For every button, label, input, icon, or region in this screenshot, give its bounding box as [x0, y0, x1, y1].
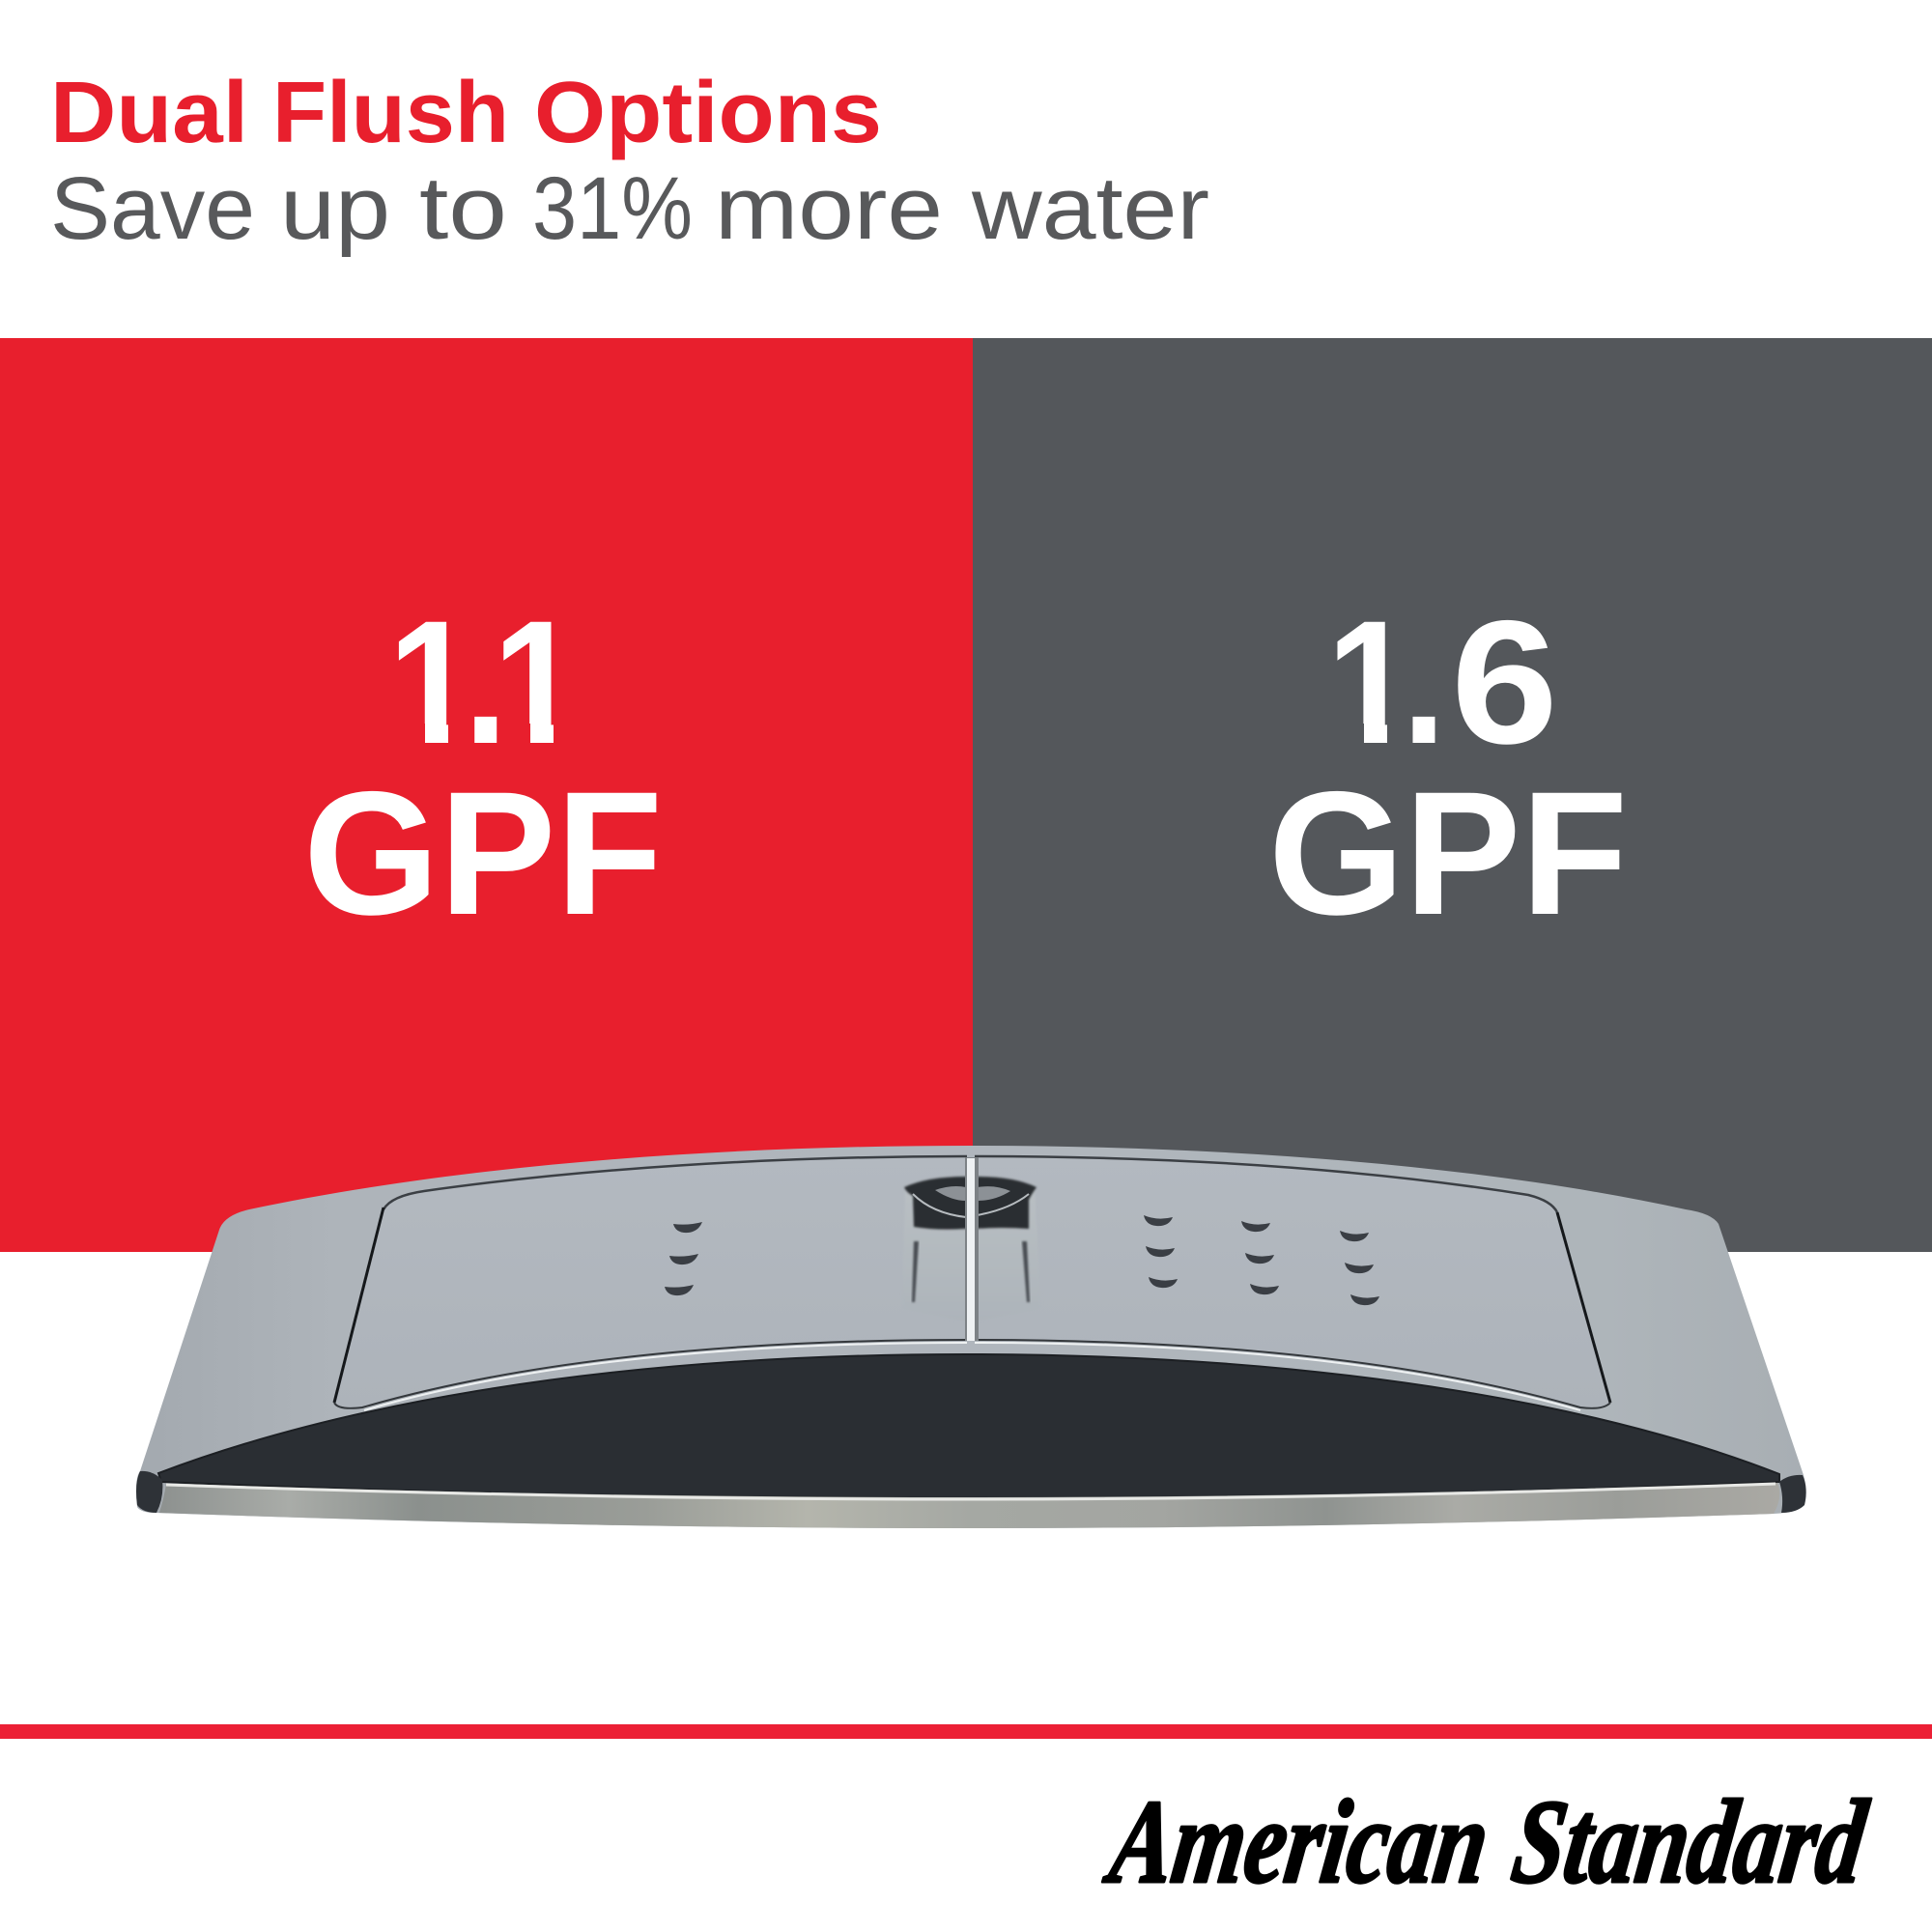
figure: 1.1 GPF: GPF	[303, 754, 663, 952]
heading: Dual Flush Options: Dual	[50, 65, 248, 161]
logo: American Standard: American	[1098, 1776, 1497, 1908]
figure: 1.1 GPF: 1.1	[388, 584, 581, 781]
panel: 1.1 GPF red block	[0, 338, 973, 1252]
left button holes	[665, 1222, 702, 1295]
dark eye reflection	[904, 1177, 1037, 1230]
left corner cap	[136, 1471, 162, 1513]
figure: 1.6 GPF: GPF	[1268, 754, 1628, 952]
heading: Dual Flush Options: Options	[534, 65, 882, 161]
button outlines	[334, 1156, 1610, 1410]
panel: 1.6 GPF gray block	[973, 338, 1932, 1252]
subheading: Save up to 31% more water: to	[419, 159, 507, 258]
plate body	[136, 1146, 1806, 1528]
left flush button	[334, 1156, 967, 1408]
center recess	[902, 1177, 1041, 1321]
right flush button	[975, 1156, 1610, 1408]
product: dual flush actuator plate	[136, 1146, 1806, 1528]
dark base face	[158, 1354, 1779, 1499]
subheading: Save up to 31% more water: more	[715, 159, 943, 258]
right button holes	[1144, 1215, 1379, 1305]
band highlight	[166, 1484, 1776, 1499]
subheading: Save up to 31% more water: 31%	[532, 159, 693, 258]
divider: red footer rule	[0, 1724, 1932, 1739]
heading: Dual Flush Options: Flush	[272, 65, 509, 161]
subheading: Save up to 31% more water: Save	[50, 159, 255, 258]
figure: 1.6 GPF	[1275, 620, 1621, 916]
center divider	[965, 1157, 979, 1341]
logo: American Standard	[1098, 1776, 1875, 1908]
polished front band	[159, 1483, 1779, 1528]
figure: 1.1 GPF	[310, 622, 657, 916]
right corner cap	[1779, 1475, 1806, 1513]
subheading: Save up to 31% more water: up	[280, 159, 390, 258]
subheading: Save up to 31% more water: water	[971, 159, 1209, 258]
figure: 1.6 GPF: 1.	[1326, 584, 1446, 781]
figure: 1.6 GPF: 6	[1451, 583, 1558, 781]
